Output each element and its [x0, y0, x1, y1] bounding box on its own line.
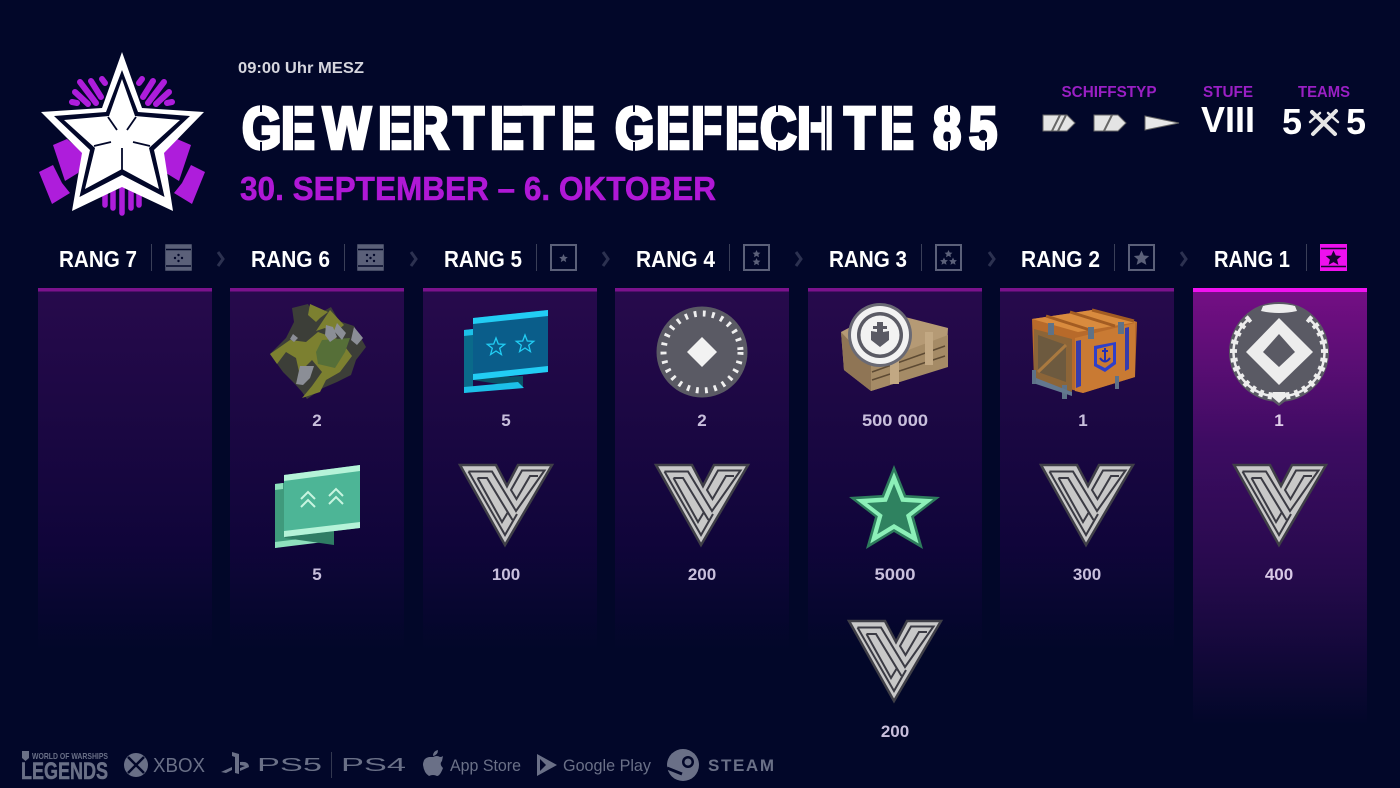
- teams block: [1282, 84, 1366, 142]
- rank header: Rang 4: RANG 4: [636, 246, 715, 272]
- rank header: Rang 6: RANG 6: [251, 246, 330, 272]
- reward amount: 5: [501, 411, 511, 430]
- rank header: Rang 3: [829, 244, 994, 272]
- reward amount: 1: [1274, 411, 1284, 430]
- logo: PS4: PS4: [341, 755, 406, 775]
- icon: wooden crate with coin: [841, 303, 948, 391]
- rank header: Rang 2: [1021, 244, 1186, 272]
- icon: league points V: [460, 465, 552, 545]
- reward amount: 500 000: [862, 411, 928, 430]
- logo: World of Warships Legends: LEGENDS: [21, 758, 108, 785]
- icon: camouflage: [270, 304, 366, 399]
- panel: Rang 1 column: [1193, 288, 1367, 726]
- icon: blue signal flag: [464, 310, 548, 393]
- date subtitle: 30. SEPTEMBER – 6. OKTOBER: [240, 170, 716, 207]
- logo: App Store: App Store: [450, 756, 521, 775]
- logo: Steam: STEAM: [708, 756, 774, 775]
- panel: Rang 4 column: [615, 288, 789, 651]
- tier value: VIII: [1201, 99, 1255, 140]
- logo: App Store: [423, 750, 521, 776]
- panel: Rang 5 column: [423, 288, 597, 651]
- logo: Xbox: [124, 753, 205, 777]
- reward amount: 2: [697, 411, 707, 430]
- reward amount: 5000: [874, 565, 916, 584]
- icon: orange crate: [1032, 310, 1137, 399]
- logo: Google Play: [537, 754, 651, 776]
- icon: league points V: [1041, 465, 1133, 545]
- icon: league points V: [1234, 465, 1326, 545]
- panel: Rang 7 column: [38, 288, 212, 651]
- panel: Rang 6 column: [230, 288, 404, 651]
- panel: Rang 3 column: [808, 288, 982, 741]
- reward amount: 200: [881, 722, 909, 741]
- rank header: Rang 5: RANG 5: [444, 246, 522, 272]
- rank header: Rang 1: [1214, 244, 1346, 272]
- icon: green signal flag: [275, 465, 360, 548]
- icon: purple stripes and ribbons: [39, 79, 205, 213]
- reward amount: 200: [688, 565, 716, 584]
- reward amount: 100: [492, 565, 520, 584]
- icon: round diamond badge: [656, 306, 748, 398]
- rank header: Rang 4: [636, 244, 801, 272]
- reward amount: 400: [1265, 565, 1293, 584]
- footer: platform logos: [21, 749, 774, 785]
- logo: PS4: [332, 752, 406, 778]
- icon: laurel medal: [1229, 302, 1329, 406]
- logo: Google Play: Google Play: [563, 756, 651, 775]
- reward amount: 2: [312, 411, 322, 430]
- icon: league points V: [849, 621, 941, 701]
- label: tier: STUFE: [1203, 84, 1253, 101]
- team size right: 5: [1346, 101, 1366, 142]
- label: teams: TEAMS: [1298, 84, 1350, 101]
- time text: 09:00 Uhr MESZ: [238, 60, 365, 77]
- rank header: Rang 1: RANG 1: [1214, 246, 1290, 272]
- logo: Xbox: XBOX: [153, 755, 205, 777]
- icon: destroyer: [1094, 115, 1126, 131]
- ship type block: [1043, 84, 1179, 131]
- rank header: Rang 5: [444, 244, 608, 272]
- icon: league points V: [656, 465, 748, 545]
- icon: carrier: [1145, 116, 1179, 130]
- reward amount: 300: [1073, 565, 1101, 584]
- logo: World of Warships Legends: [21, 751, 108, 785]
- title: GEWERTETE GEFECHTE 85: [242, 95, 997, 161]
- icon: crossed swords: [1310, 111, 1338, 134]
- rank header: Rang 7: [59, 244, 223, 272]
- reward amount: 5: [312, 565, 322, 584]
- icon: cruiser: [1043, 115, 1075, 131]
- icon: green star: [849, 465, 940, 549]
- label: ship type: SCHIFFSTYP: [1062, 84, 1156, 101]
- logo: Steam: [667, 749, 774, 781]
- logo: World of Warships Legends: WORLD OF WARSHIPS: [32, 751, 108, 761]
- team size left: 5: [1282, 101, 1302, 142]
- panel: Rang 2 column: [1000, 288, 1174, 651]
- logo: star emblem: [39, 52, 205, 213]
- reward amount: 1: [1078, 411, 1088, 430]
- rank header: Rang 2: RANG 2: [1021, 246, 1100, 272]
- logo: PS5: [221, 752, 322, 775]
- rank header: Rang 7: RANG 7: [59, 246, 137, 272]
- rank header: Rang 6: [251, 244, 416, 272]
- icon: white star: [41, 52, 204, 211]
- rank header: Rang 3: RANG 3: [829, 246, 907, 272]
- logo: PS5: PS5: [257, 755, 322, 775]
- tier block: [1201, 84, 1255, 140]
